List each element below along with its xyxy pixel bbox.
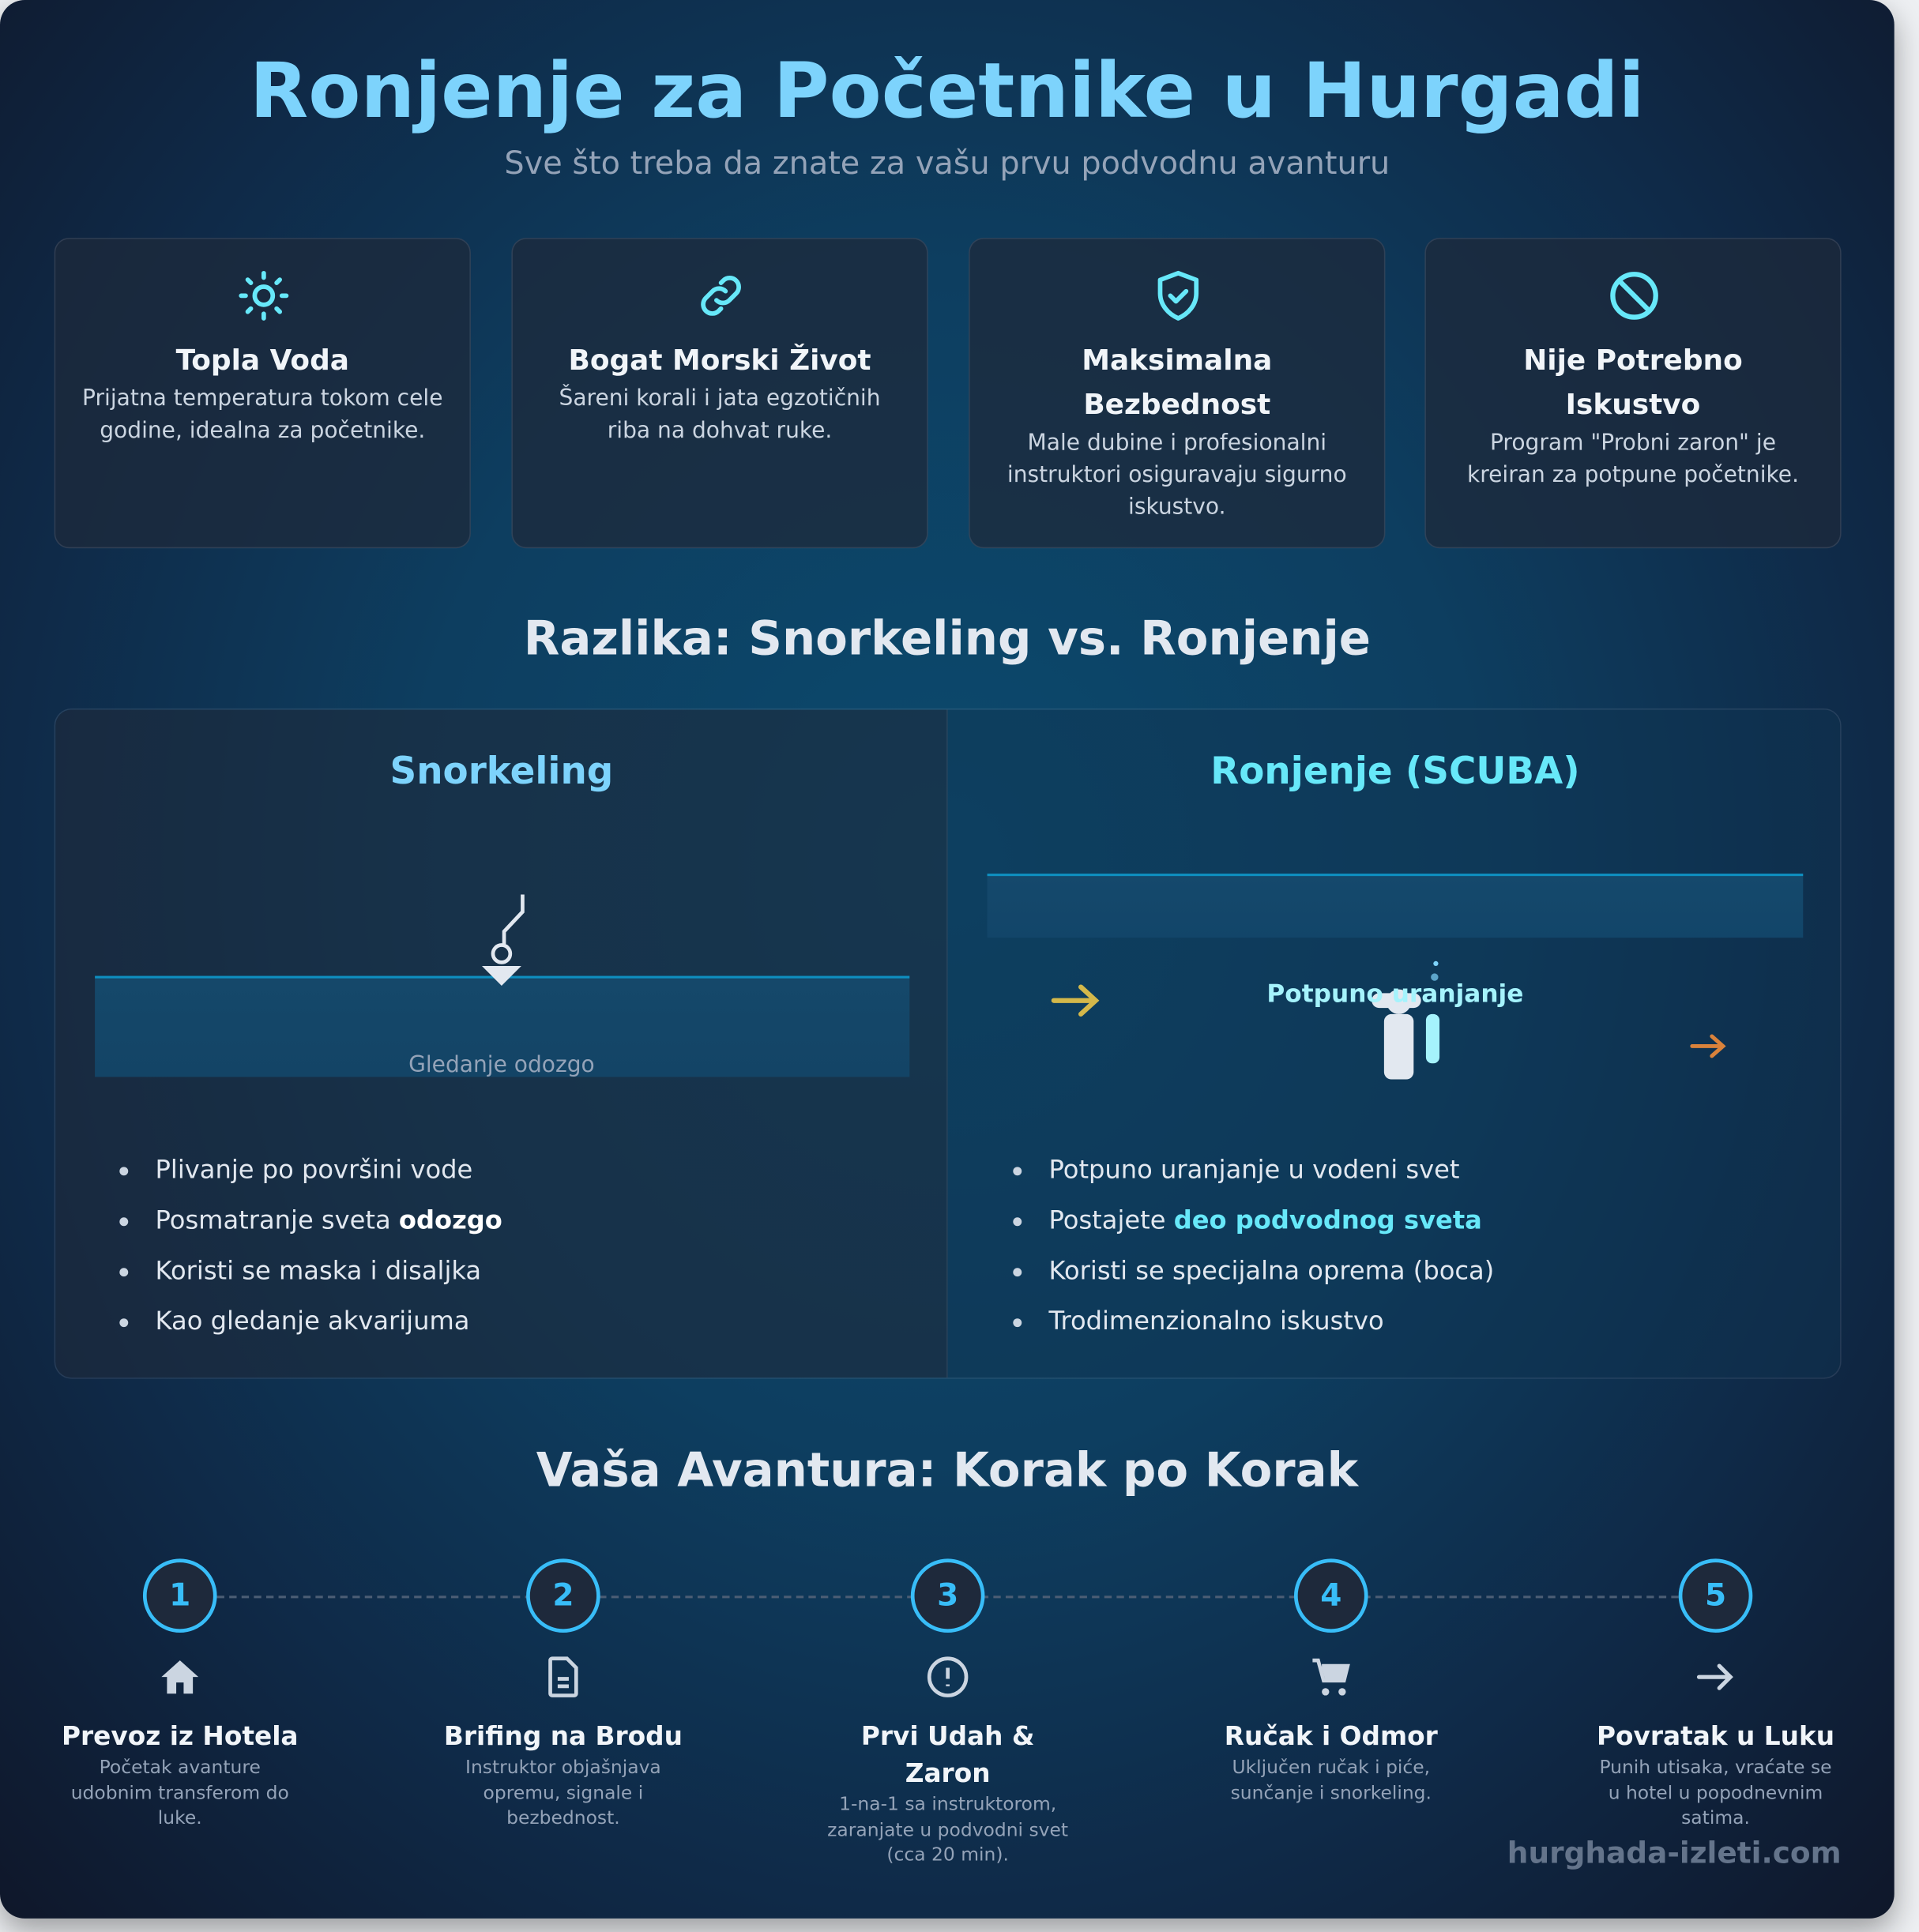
feature card: iskustvo: Nije Potrebno Iskustvo (1523, 345, 1743, 422)
step 2: 2 (552, 1577, 574, 1613)
step 2: Brifing na Brodu (444, 1721, 683, 1751)
arrow orange (1690, 1035, 1725, 1058)
step 1: 1 (169, 1577, 190, 1613)
step 5: 5 (1705, 1577, 1726, 1613)
step 4 (1225, 1558, 1438, 1803)
heading: snorkeling: Snorkeling (390, 750, 613, 794)
step 5: Povratak u Luku (1597, 1721, 1834, 1751)
bullets scuba: Trodimenzionalno iskustvo (1049, 1306, 1384, 1336)
step 1: Početak avanture udobnim transferom do luke. (71, 1756, 289, 1829)
step 2 (444, 1558, 683, 1829)
icon: home (161, 1660, 198, 1693)
feature card: topla voda: Topla Voda (176, 345, 349, 377)
icon: document (548, 1656, 578, 1697)
title: Ronjenje za Početnike u Hurgadi (250, 47, 1645, 136)
feature card: morski zivot: Bogat Morski Život (568, 345, 871, 377)
feature card: bezbednost (969, 238, 1385, 548)
icon: link (701, 276, 741, 316)
bullets snorkel: Koristi se maska i disaljka (156, 1256, 481, 1285)
feature card: morski zivot (511, 238, 928, 548)
step 5: Punih utisaka, vraćate se u hotel u popodnevnim satima. (1599, 1756, 1832, 1829)
step 1: Prevoz iz Hotela (62, 1721, 299, 1751)
step 1 (62, 1558, 299, 1829)
feature card: iskustvo: Program "Probni zaron" je kreiran za potpune početnike. (1467, 430, 1799, 488)
icon: diver (1372, 960, 1439, 1079)
icon: cart (1312, 1659, 1350, 1695)
icon: alert (928, 1656, 969, 1697)
step 4: Uključen ručak i piće, sunčanje i snorkeling. (1231, 1756, 1432, 1803)
label: potpuno uranjanje: Potpuno uranjanje (1266, 979, 1523, 1008)
heading: scuba: Ronjenje (SCUBA) (1210, 750, 1580, 794)
feature card: bezbednost: Maksimalna Bezbednost (1082, 345, 1272, 422)
dashed timeline (217, 1596, 1679, 1598)
feature card: bezbednost: Male dubine i profesionalni instruktori osiguravaju sigurno iskustvo. (1007, 430, 1347, 520)
bullets snorkel: Posmatranje sveta odozgo (156, 1205, 502, 1235)
step 4: 4 (1320, 1577, 1341, 1613)
feature card: topla voda (55, 238, 471, 548)
feature card: iskustvo (1424, 238, 1842, 548)
heading: avantura: Vaša Avantura: Korak po Korak (536, 1443, 1358, 1497)
water band snorkel (95, 976, 909, 1077)
water band scuba (988, 874, 1803, 938)
icon: arrow right (1697, 1663, 1733, 1690)
step 3: Zaron (905, 1758, 991, 1788)
panel: comparison (55, 709, 1842, 1379)
bullets snorkel (119, 1155, 502, 1336)
bullets snorkel: Plivanje po površini vode (156, 1155, 472, 1184)
label: gledanje odozgo: Gledanje odozgo (408, 1052, 595, 1078)
bullets scuba: Potpuno uranjanje u vodeni svet (1049, 1155, 1460, 1184)
footer brand: hurghada-izleti.com (1507, 1836, 1842, 1870)
step 2: Instruktor objašnjava opremu, signale i bezbednost. (465, 1756, 661, 1829)
heading: razlika: Razlika: Snorkeling vs. Ronjenje (524, 611, 1371, 665)
step 3: Prvi Udah & (861, 1721, 1034, 1751)
step 4: Ručak i Odmor (1225, 1721, 1438, 1751)
bullets snorkel: Kao gledanje akvarijuma (156, 1306, 469, 1336)
step 5 (1597, 1558, 1834, 1829)
subtitle: Sve što treba da znate za vašu prvu podvodnu avanturu (504, 145, 1390, 182)
step 3: 1-na-1 sa instruktorom, zaranjate u podvodni svet (cca 20 min). (827, 1793, 1068, 1866)
icon: shield (1158, 270, 1199, 321)
icon: ban (1610, 272, 1658, 320)
bullets scuba: Koristi se specijalna oprema (boca) (1049, 1256, 1494, 1285)
bullets scuba (1013, 1155, 1494, 1336)
step 3: 3 (937, 1577, 958, 1613)
icon: sun (239, 271, 289, 321)
step 3 (827, 1558, 1068, 1866)
feature card: morski zivot: Šareni korali i jata egzotičnih riba na dohvat ruke. (559, 385, 881, 444)
panel: scuba (948, 710, 1842, 1380)
panel: snorkeling (55, 710, 948, 1380)
arrow yellow (1051, 984, 1100, 1017)
bullets scuba: Postajete deo podvodnog sveta (1049, 1205, 1482, 1235)
icon: snorkel (482, 894, 525, 986)
feature card: topla voda: Prijatna temperatura tokom cele godine, idealna za početnike. (82, 385, 442, 444)
